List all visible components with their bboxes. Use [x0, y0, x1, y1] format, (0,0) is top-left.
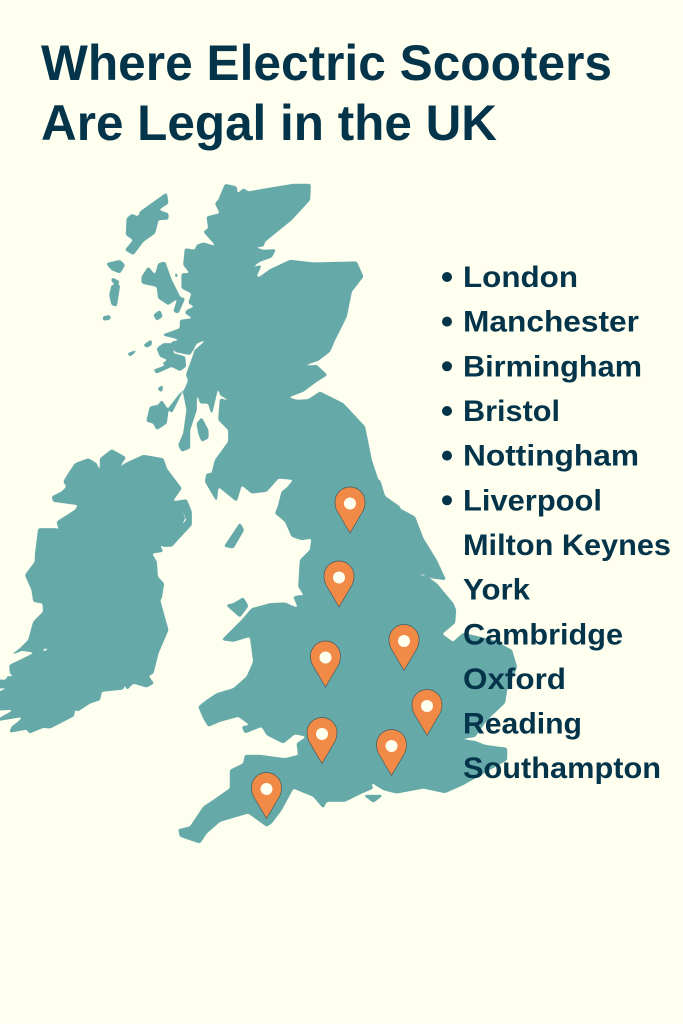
title	[41, 35, 612, 151]
title: Where Electric Scooters	[41, 35, 612, 91]
city list: Cambridge	[463, 618, 623, 651]
map region: Scotland and islands	[103, 184, 400, 512]
city list	[442, 261, 671, 785]
map region: England and Wales	[178, 480, 517, 843]
city list: London	[463, 261, 578, 294]
pin 2	[324, 561, 354, 607]
map: UK and Ireland	[0, 184, 517, 843]
city list: Oxford	[463, 663, 566, 696]
pin 5	[412, 690, 442, 736]
city list: Liverpool	[463, 484, 602, 517]
city list: Nottingham	[463, 440, 639, 472]
pin 1	[335, 487, 365, 533]
location pins	[252, 487, 442, 818]
pin 4	[389, 624, 419, 670]
title: Are Legal in the UK	[41, 95, 497, 151]
list bullets	[442, 272, 452, 505]
city list: Southampton	[463, 752, 661, 785]
city list: Birmingham	[463, 350, 642, 383]
city list: Milton Keynes	[463, 529, 671, 562]
city list: Bristol	[463, 395, 560, 428]
pin 6	[376, 730, 406, 776]
city list: Manchester	[463, 306, 639, 339]
map detail: Strangford Lough	[183, 510, 186, 524]
city list: Reading	[463, 708, 582, 740]
map region: Ireland	[0, 449, 192, 733]
city list: York	[463, 574, 530, 607]
pin 3	[310, 641, 340, 687]
pin 7	[307, 718, 337, 764]
pin 8	[252, 772, 282, 818]
